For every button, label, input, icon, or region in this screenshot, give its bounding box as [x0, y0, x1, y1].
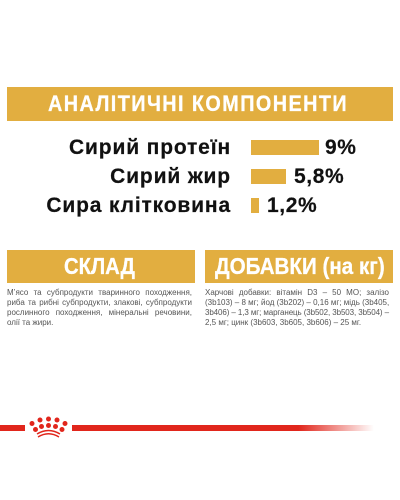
heading: composition: СКЛАД [64, 253, 135, 279]
text: additives: (3b103) – 8 мг; йод (3b202) – 0,16 мг; мідь (3b405, [205, 298, 389, 307]
text: additives [205, 288, 390, 327]
panel: analytical components heading [7, 87, 393, 121]
heading: analytical components: АНАЛІТИЧНІ КОМПОНЕНТИ [48, 91, 348, 116]
label: crude fibre: Сира клітковина [46, 194, 231, 217]
icon: royal crown logo [30, 416, 68, 438]
label: crude protein: Сирий протеїн [69, 136, 231, 159]
text: composition: риба та рибні субпродукти, злакові, субпродукти [7, 298, 192, 307]
bar: crude fat [251, 169, 286, 184]
text: additives: 2,5 мг; цинк (3b603, 3b605, 3b606) – 25 мг. [205, 318, 361, 327]
label: crude fat: Сирий жир [110, 165, 231, 188]
text: composition: М’ясо та субпродукти тваринного походження, [7, 288, 192, 297]
value: crude protein: 9% [325, 136, 357, 159]
value: crude fat: 5,8% [294, 165, 344, 188]
footer line: left segment [0, 425, 25, 431]
text: additives: Харчові добавки: вітамін D3 – 50 МО; залізо [205, 288, 389, 297]
heading: additives per kg: ДОБАВКИ (на кг) [215, 253, 385, 279]
text: composition [7, 288, 192, 327]
bar: crude fibre [251, 198, 259, 213]
value: crude fibre: 1,2% [267, 194, 317, 217]
panel: additives heading [205, 250, 393, 283]
bar: crude protein [251, 140, 319, 155]
text: additives: 3b406) – 1,3 мг; марганець (3b502, 3b503, 3b504) – [205, 308, 389, 317]
panel: composition heading [7, 250, 195, 283]
text: composition: рослинного походження, мінеральні речовини, [7, 308, 192, 317]
text: composition: олії та жири. [7, 318, 53, 327]
footer line: right segment fading out [72, 425, 374, 431]
